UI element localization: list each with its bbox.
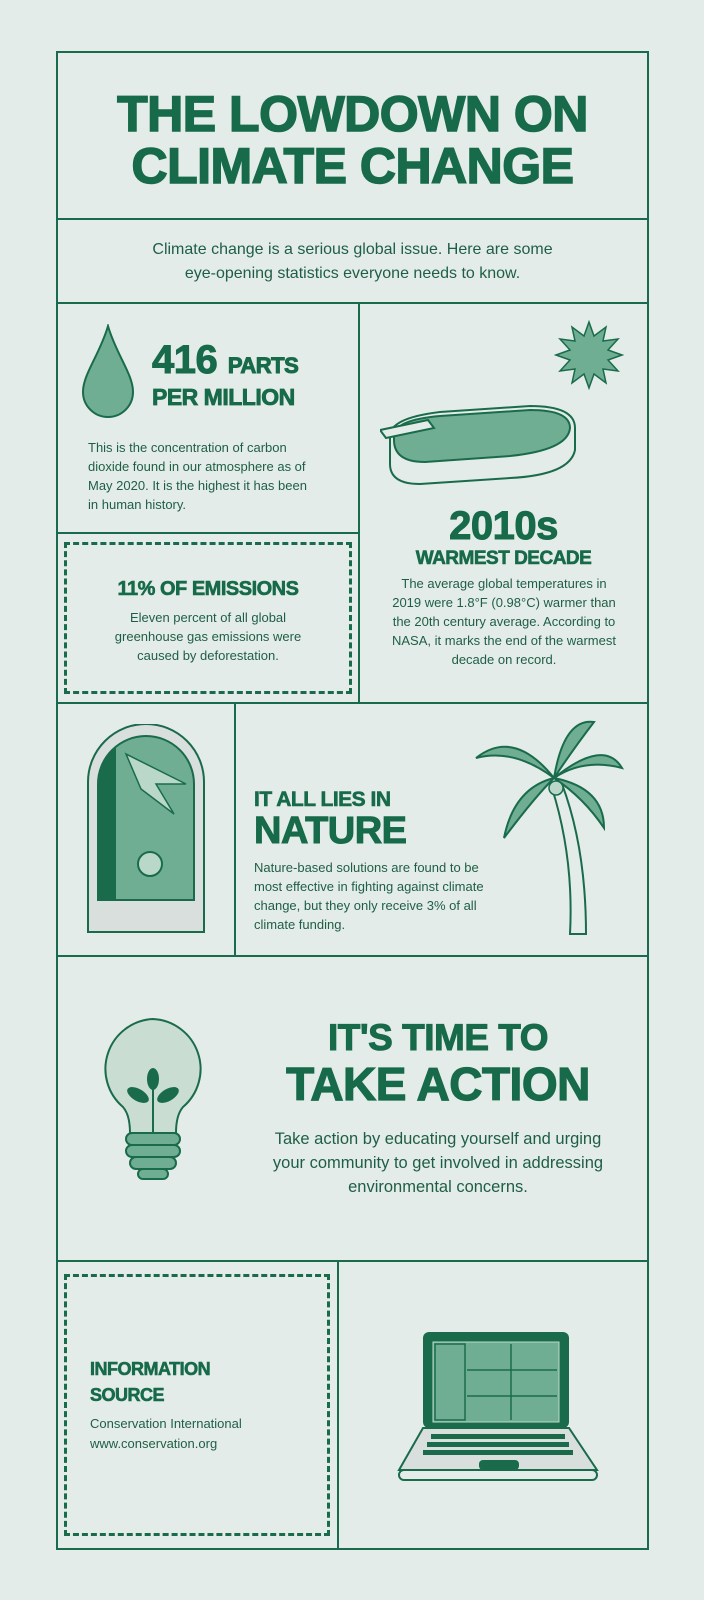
panel: take action xyxy=(56,955,649,1262)
stat text: This is the concentration of carbon dioxide found in our atmosphere as of May 2020. It is the highest it has been in human history. xyxy=(88,440,307,512)
subtitle text xyxy=(152,241,553,282)
icon: palm tree xyxy=(475,720,624,935)
stat subheading: PER MILLION xyxy=(152,384,295,410)
subtitle panel xyxy=(56,218,649,304)
heading: IT'S TIME TO xyxy=(328,1017,548,1058)
heading xyxy=(90,1359,210,1405)
panel: it all lies in nature xyxy=(234,702,649,957)
heading: IT ALL LIES IN xyxy=(254,788,391,811)
icon: sun xyxy=(554,320,624,390)
heading: 11% OF EMISSIONS xyxy=(118,578,298,600)
panel: 11% emissions xyxy=(56,532,360,704)
title: CLIMATE CHANGE xyxy=(131,138,574,194)
icon: pool xyxy=(380,405,576,485)
stat text: The average global temperatures in 2019 were 1.8°F (0.98°C) warmer than the 20th century average. According to NASA, it marks the end of the warmest decade on record. xyxy=(392,576,616,667)
icon: water drop xyxy=(82,324,134,418)
text: Eleven percent of all global greenhouse gas emissions were caused by deforestation. xyxy=(115,610,301,663)
dashed frame xyxy=(64,1274,330,1536)
stat heading: 2010s xyxy=(449,504,558,548)
icon: arch window xyxy=(87,724,205,933)
title: THE LOWDOWN ON xyxy=(117,86,588,142)
panel: laptop xyxy=(337,1260,649,1550)
title panel xyxy=(56,51,649,220)
icon: lightbulb xyxy=(104,1018,202,1180)
stat heading: 416 PARTS xyxy=(152,338,298,382)
panel: nature icon xyxy=(56,702,236,957)
text: Take action by educating yourself and urging your community to get involved in addressing environmental concerns. xyxy=(273,1130,603,1196)
icon: laptop xyxy=(397,1332,599,1481)
heading: INFORMATION xyxy=(90,1359,210,1379)
text: Nature-based solutions are found to be most effective in fighting against climate change, but they only receive 3% of all climate funding. xyxy=(254,860,484,932)
panel: information source xyxy=(56,1260,339,1550)
stat subheading: WARMEST DECADE xyxy=(416,548,591,569)
source text: www.conservation.org xyxy=(90,1436,217,1451)
heading large: TAKE ACTION xyxy=(286,1058,590,1110)
dashed frame xyxy=(64,542,352,694)
heading large: NATURE xyxy=(254,810,407,852)
title xyxy=(116,86,588,194)
panel: 2010s xyxy=(358,302,649,704)
subtitle text: Climate change is a serious global issue. Here are some xyxy=(152,241,553,258)
heading: SOURCE xyxy=(90,1385,164,1405)
subtitle text: eye-opening statistics everyone needs to know. xyxy=(185,265,520,282)
source text xyxy=(90,1416,242,1451)
panel: 416 ppm xyxy=(56,302,360,534)
source text: Conservation International xyxy=(90,1416,242,1431)
